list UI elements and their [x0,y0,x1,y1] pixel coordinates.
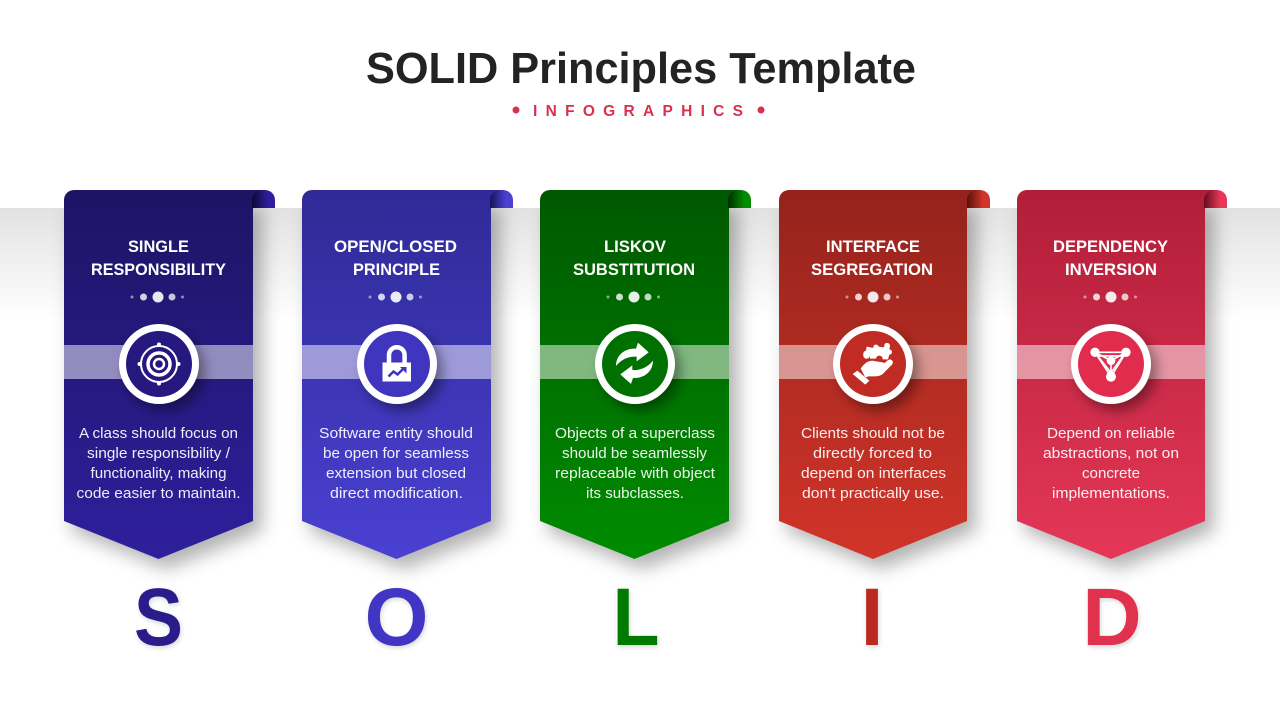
band [302,345,491,379]
description [555,425,716,502]
heading: OPEN/CLOSED [334,238,457,256]
letter L: L [612,572,660,663]
letter D: D [1082,572,1142,663]
description: abstractions, not on [1043,445,1179,462]
heading: LISKOV [604,238,666,256]
panel: interface segregation [779,190,990,569]
letter S: S [134,572,183,663]
heading [573,238,695,279]
description: directly forced to [813,445,932,462]
panel: single responsibility [64,190,275,569]
description [801,425,946,502]
description: should be seamlessly [562,445,707,462]
icon: refresh arrows [595,324,681,411]
dots [846,292,899,302]
heading [811,238,933,279]
heading: PRINCIPLE [353,261,440,279]
heading: RESPONSIBILITY [91,261,226,279]
description: Software entity should [319,425,473,442]
heading [334,238,457,279]
dots [368,292,422,302]
description: Clients should not be [801,425,945,442]
description: implementations. [1052,485,1170,502]
description: its subclasses. [586,485,684,502]
subtitle: INFOGRAPHICS [533,103,743,120]
description: concrete [1082,465,1140,482]
heading: SUBSTITUTION [573,261,695,279]
description: direct modification. [330,485,463,502]
title: SOLID Principles Template [366,44,916,93]
letter O: O [365,572,428,663]
icon: lock [357,324,443,411]
description [1043,425,1179,502]
heading: SINGLE [128,238,189,256]
band [779,345,967,379]
description: depend on interfaces [801,465,946,482]
band [1017,345,1205,379]
description: be open for seamless [323,445,469,462]
description [76,425,240,502]
dots [1084,292,1137,302]
dots [130,292,184,302]
heading: INTERFACE [826,238,920,256]
description: A class should focus on [79,425,238,442]
description: functionality, making [90,465,226,482]
icon: target [119,324,205,411]
panel: liskov substitution [540,190,751,569]
description: extension but closed [326,465,466,482]
description: Depend on reliable [1047,425,1175,442]
heading: DEPENDENCY [1053,238,1168,256]
heading [91,238,226,279]
letter I: I [861,572,883,663]
description: code easier to maintain. [76,485,240,502]
dots [606,292,660,302]
background band [0,208,1280,320]
band [64,345,253,379]
heading [1053,238,1168,279]
panel: dependency inversion [1017,190,1227,569]
icon: network triangle [1071,324,1157,411]
description: single responsibility / [87,445,231,462]
band [540,345,729,379]
panel: open/closed principle [302,190,513,569]
description: replaceable with object [555,465,716,482]
description: Objects of a superclass [555,425,715,442]
description: don't practically use. [802,485,944,502]
icon: hand with puzzle piece [833,324,919,411]
heading: INVERSION [1065,261,1157,279]
heading: SEGREGATION [811,261,933,279]
description [319,425,473,502]
